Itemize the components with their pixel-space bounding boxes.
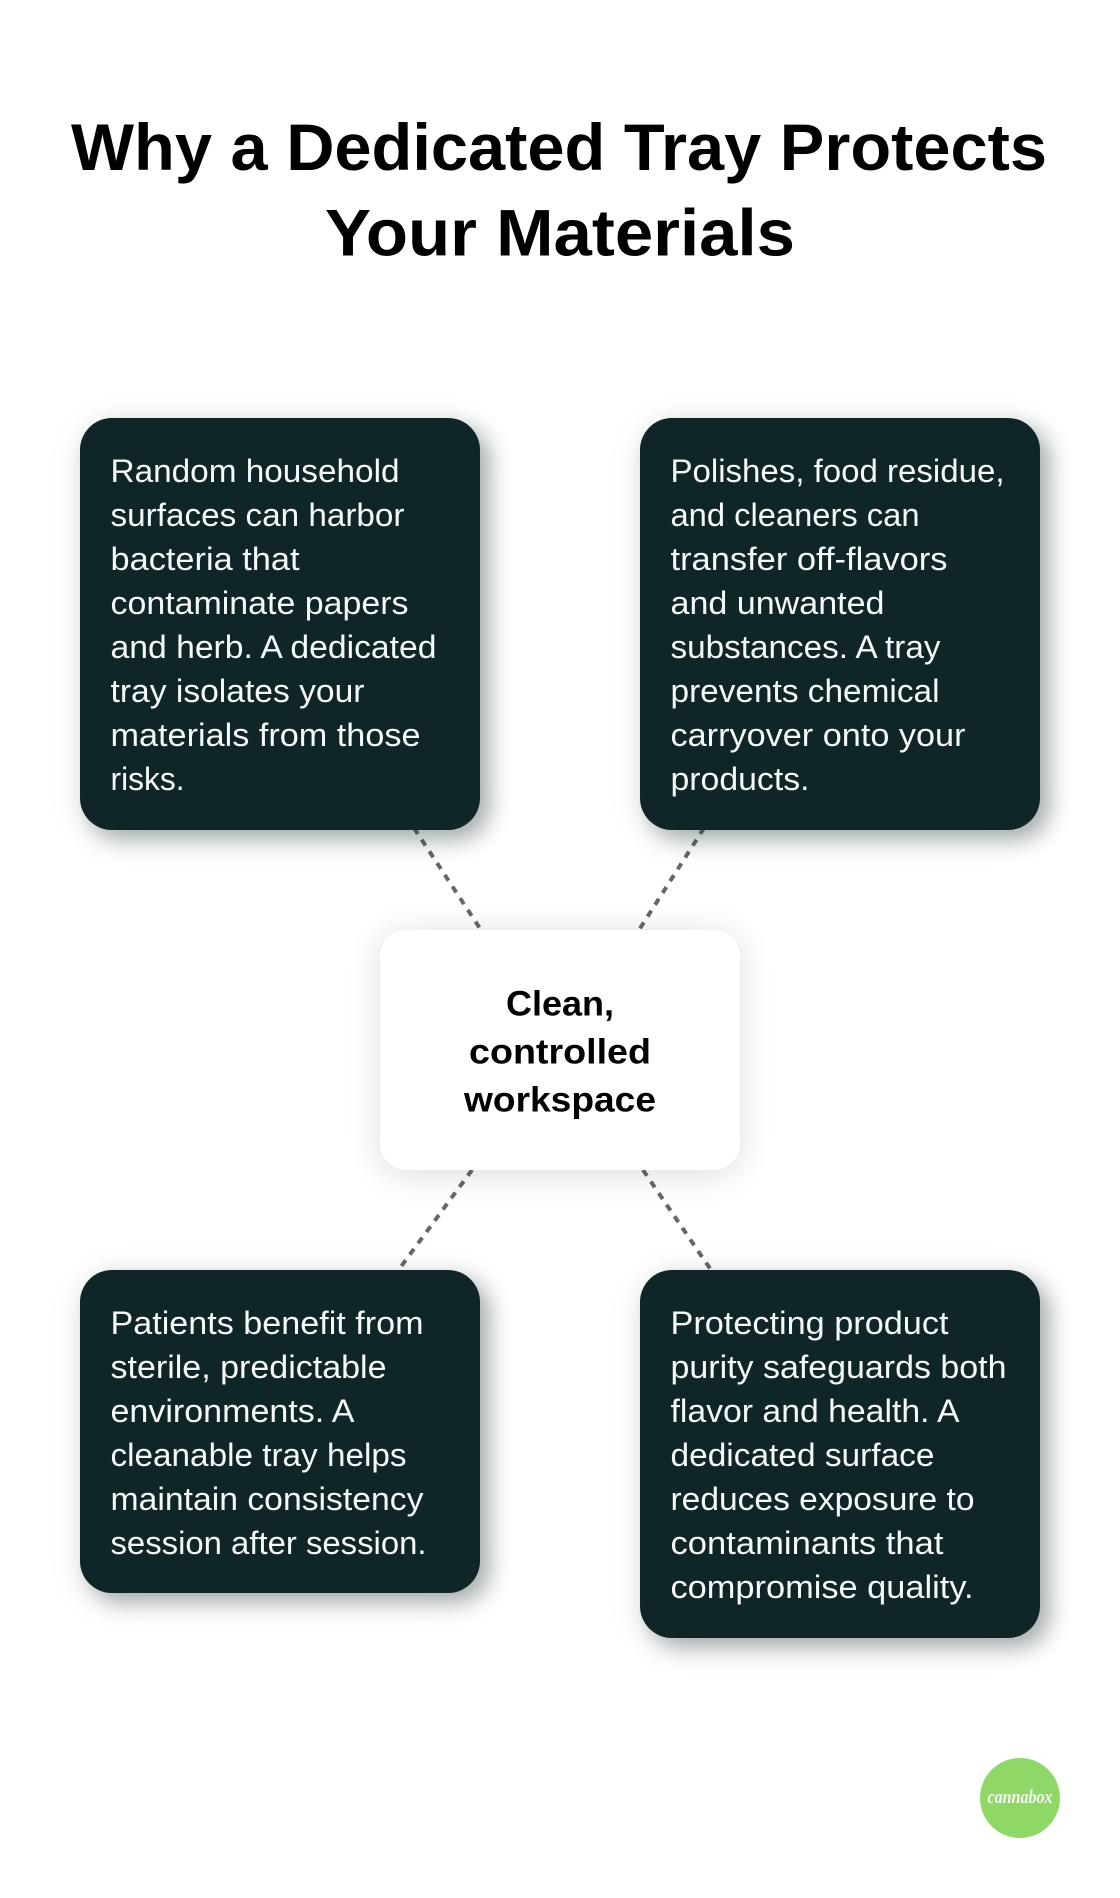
panel: product purity	[640, 1270, 1040, 1638]
panel: chemical carryover	[640, 418, 1040, 830]
panel: chemical carryover: prevents chemical	[670, 673, 940, 709]
panel: center workspace	[380, 930, 740, 1170]
panel: product purity: contaminants that	[670, 1525, 944, 1561]
panel: chemical carryover: and unwanted	[670, 585, 884, 621]
panel: chemical carryover: and cleaners can	[670, 497, 920, 533]
panel: surface bacteria: risks.	[110, 761, 184, 797]
panel: chemical carryover: products.	[670, 761, 810, 797]
icon: cannabox logo	[980, 1758, 1060, 1838]
panel: patient consistency: session after session.	[110, 1525, 427, 1561]
panel: product purity: purity safeguards both	[670, 1349, 1006, 1385]
panel: product purity: compromise quality.	[670, 1569, 974, 1605]
title	[71, 110, 1047, 270]
panel: patient consistency: sterile, predictable	[110, 1349, 386, 1385]
panel: patient consistency: cleanable tray helps	[110, 1437, 406, 1473]
dashed connectors	[400, 830, 712, 1270]
panel: surface bacteria: surfaces can harbor	[110, 497, 405, 533]
panel: chemical carryover: transfer off-flavors	[670, 541, 948, 577]
panel: center workspace: controlled	[469, 1032, 651, 1072]
panel: surface bacteria: contaminate papers	[110, 585, 408, 621]
panel: surface bacteria: bacteria that	[110, 541, 300, 577]
panel: chemical carryover: Polishes, food residue,	[670, 453, 1004, 489]
title: Why a Dedicated Tray Protects	[71, 110, 1047, 184]
panel: chemical carryover: substances. A tray	[670, 629, 940, 665]
title: Your Materials	[325, 196, 795, 270]
panel: surface bacteria: tray isolates your	[110, 673, 365, 709]
panel: patient consistency: environments. A	[110, 1393, 355, 1429]
panel: patient consistency	[80, 1270, 480, 1593]
panel: surface bacteria: Random household	[110, 453, 400, 489]
panel: product purity: Protecting product	[670, 1305, 949, 1341]
panel: surface bacteria: and herb. A dedicated	[110, 629, 436, 665]
panel: chemical carryover: carryover onto your	[670, 717, 966, 753]
panel: patient consistency: Patients benefit from	[110, 1305, 424, 1341]
panel: product purity: flavor and health. A	[670, 1393, 960, 1429]
panel: patient consistency: maintain consistency	[110, 1481, 423, 1517]
panel: product purity: dedicated surface	[670, 1437, 934, 1473]
panel: center workspace: Clean,	[506, 984, 614, 1024]
panel: surface bacteria: materials from those	[110, 717, 420, 753]
panel: surface bacteria	[80, 418, 480, 830]
panel: product purity: reduces exposure to	[670, 1481, 974, 1517]
panel: center workspace: workspace	[463, 1080, 656, 1120]
